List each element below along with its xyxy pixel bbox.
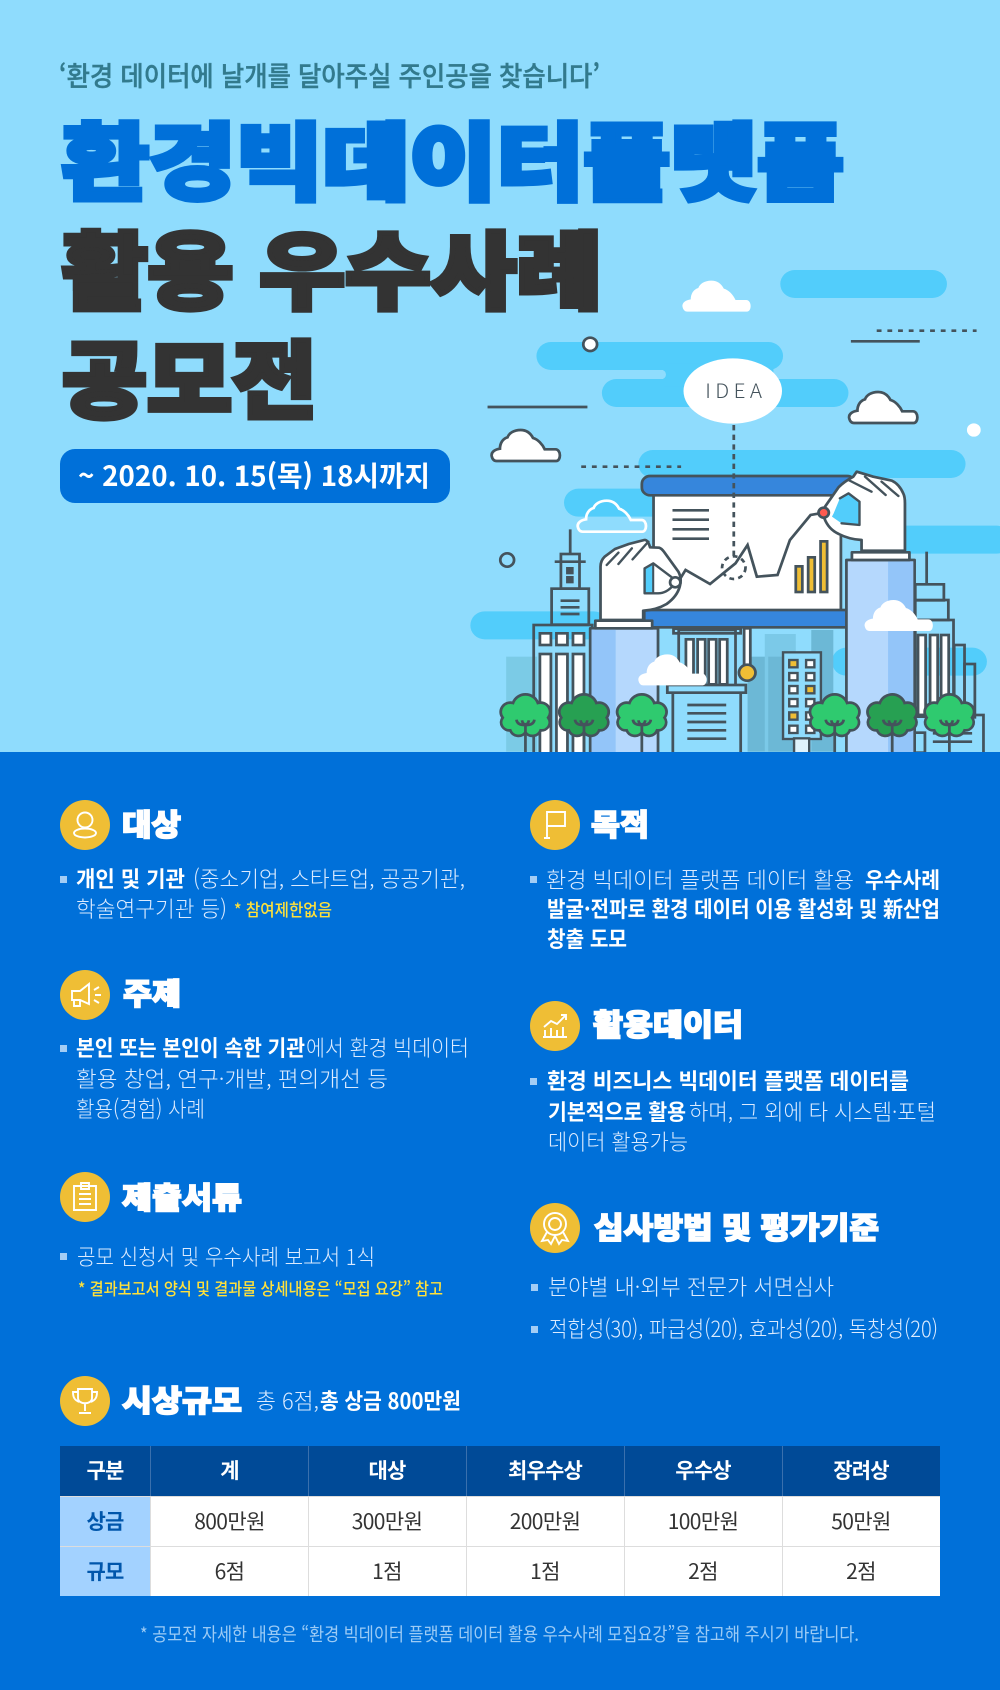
prize table: 1점 bbox=[530, 1556, 560, 1586]
title: 활용 우수사례 bbox=[62, 206, 602, 327]
text: 주제 body bbox=[60, 1031, 469, 1124]
heading: 심사방법 및 평가기준: 심사방법 및 평가기준 bbox=[594, 1204, 879, 1248]
footnote: * 공모전 자세한 내용은 “환경 빅데이터 플랫폼 데이터 활용 우수사례 모집요강”을 참고해 주시기 바랍니다. bbox=[140, 1621, 859, 1647]
text: 주제 body: 본인 또는 본인이 속한 기관 bbox=[76, 1031, 305, 1063]
prize table: 6점 bbox=[215, 1556, 244, 1586]
title: 환경빅데이터플랫폼 bbox=[62, 97, 844, 218]
icon: rising chart bbox=[530, 1001, 580, 1051]
prize table: 우수상 bbox=[675, 1455, 731, 1485]
IDEA bubble: IDEA bbox=[705, 374, 762, 404]
text: 심사방법 body: 적합성(30), 파급성(20), 효과성(20), 독창성(20) bbox=[549, 1312, 938, 1344]
prize table: 800만원 bbox=[194, 1506, 265, 1536]
heading: 목적: 목적 bbox=[591, 800, 649, 844]
left building bbox=[534, 529, 592, 754]
text: prize summary bbox=[256, 1384, 461, 1416]
text: 목적 body: 우수사례 bbox=[865, 863, 940, 895]
text: 활용데이터 body: 기본적으로 활용 bbox=[548, 1095, 686, 1127]
title: 공모전 bbox=[62, 315, 317, 436]
text: 활용데이터 body: 환경 비즈니스 빅데이터 플랫폼 데이터를 bbox=[547, 1064, 909, 1096]
data board bbox=[642, 425, 855, 627]
text: 대상 body: 학술연구기관 등) bbox=[76, 892, 227, 924]
text: 대상 body: * 참여제한없음 bbox=[234, 896, 332, 921]
text: 주제 body: 활용(경험) 사례 bbox=[76, 1092, 205, 1124]
title bbox=[62, 97, 844, 436]
right hand and sleeve bbox=[819, 472, 915, 753]
deadline pill: ~ 2020. 10. 15(목) 18시까지 bbox=[78, 455, 430, 495]
icon: award ribbon bbox=[530, 1203, 580, 1253]
prize table bbox=[60, 1446, 940, 1596]
prize table: 상금 bbox=[86, 1506, 124, 1536]
left hand and sleeve bbox=[590, 540, 681, 753]
text: 목적 body: 창출 도모 bbox=[547, 922, 627, 954]
text: prize summary: 총 상금 800만원 bbox=[320, 1384, 461, 1416]
heading: 제출서류: 제출서류 bbox=[122, 1174, 242, 1218]
icon: megaphone bbox=[60, 970, 110, 1020]
prize table: 계 bbox=[220, 1455, 239, 1485]
prize table: 100만원 bbox=[668, 1506, 738, 1536]
prize table: 300만원 bbox=[352, 1506, 422, 1536]
icon: trophy bbox=[60, 1376, 110, 1426]
panel: 대상 bbox=[60, 800, 465, 924]
prize table: 규모 bbox=[86, 1556, 124, 1586]
deadline pill bbox=[60, 449, 450, 503]
panel: 목적 bbox=[530, 800, 940, 954]
text: 제출서류 body: * 결과보고서 양식 및 결과물 상세내용은 “모집 요강” 참고 bbox=[78, 1275, 443, 1300]
text: 목적 body: 발굴·전파로 환경 데이터 이용 활성화 및 新산업 bbox=[547, 892, 940, 924]
prize table: 2점 bbox=[688, 1556, 718, 1586]
text: 대상 body: 개인 및 기관 bbox=[76, 862, 185, 894]
trees bbox=[501, 694, 974, 753]
prize table: 1점 bbox=[372, 1556, 402, 1586]
heading: 활용데이터: 활용데이터 bbox=[593, 1000, 743, 1044]
prize table: 대상 bbox=[368, 1455, 406, 1485]
icon: person bbox=[60, 800, 110, 850]
text: 활용데이터 body: 데이터 활용가능 bbox=[548, 1125, 688, 1157]
text: 목적 body bbox=[530, 863, 940, 954]
heading: 주제: 주제 bbox=[123, 970, 181, 1014]
panel: 심사방법 및 평가기준 bbox=[530, 1203, 938, 1344]
IDEA bubble bbox=[684, 358, 782, 424]
center buildings bbox=[667, 628, 755, 753]
text: 대상 body: (중소기업, 스타트업, 공공기관, bbox=[193, 862, 465, 894]
prize table: 구분 bbox=[86, 1455, 124, 1485]
text: 심사방법 body bbox=[531, 1270, 938, 1344]
illustration: city and data board bbox=[470, 270, 1000, 752]
panel: 주제 bbox=[60, 970, 469, 1124]
prize table: 200만원 bbox=[510, 1506, 580, 1536]
heading: 대상: 대상 bbox=[122, 800, 181, 844]
panel: 활용데이터 bbox=[530, 1000, 936, 1157]
text: 제출서류 body: 공모 신청서 및 우수사례 보고서 1식 bbox=[77, 1240, 375, 1272]
center tower bbox=[783, 652, 821, 755]
text: 주제 body: 에서 환경 빅데이터 bbox=[306, 1031, 469, 1063]
prize table: 50만원 bbox=[831, 1506, 891, 1536]
text: 대상 body bbox=[60, 862, 465, 924]
text: 활용데이터 body bbox=[530, 1064, 936, 1157]
heading: 시상규모: 시상규모 bbox=[122, 1376, 242, 1420]
icon: flag bbox=[530, 800, 580, 850]
prize table: 장려상 bbox=[833, 1455, 889, 1485]
text: 제출서류 body bbox=[60, 1240, 443, 1300]
text: 심사방법 body: 분야별 내·외부 전문가 서면심사 bbox=[548, 1270, 834, 1302]
prize table: 2점 bbox=[846, 1556, 876, 1586]
prize table: 최우수상 bbox=[508, 1455, 583, 1485]
icon: clipboard bbox=[60, 1172, 110, 1222]
text: 목적 body: 환경 빅데이터 플랫폼 데이터 활용 bbox=[546, 863, 854, 895]
panel: 제출서류 bbox=[60, 1172, 443, 1300]
subtitle: ‘환경 데이터에 날개를 달아주실 주인공을 찾습니다’ bbox=[59, 55, 600, 94]
right building bbox=[915, 552, 983, 753]
text: 활용데이터 body: 하며, 그 외에 타 시스템·포털 bbox=[689, 1095, 936, 1127]
panel: 시상규모 bbox=[60, 1376, 940, 1596]
text: prize summary: 총 6점, bbox=[256, 1384, 319, 1416]
text: 주제 body: 활용 창업, 연구·개발, 편의개선 등 bbox=[76, 1062, 388, 1094]
